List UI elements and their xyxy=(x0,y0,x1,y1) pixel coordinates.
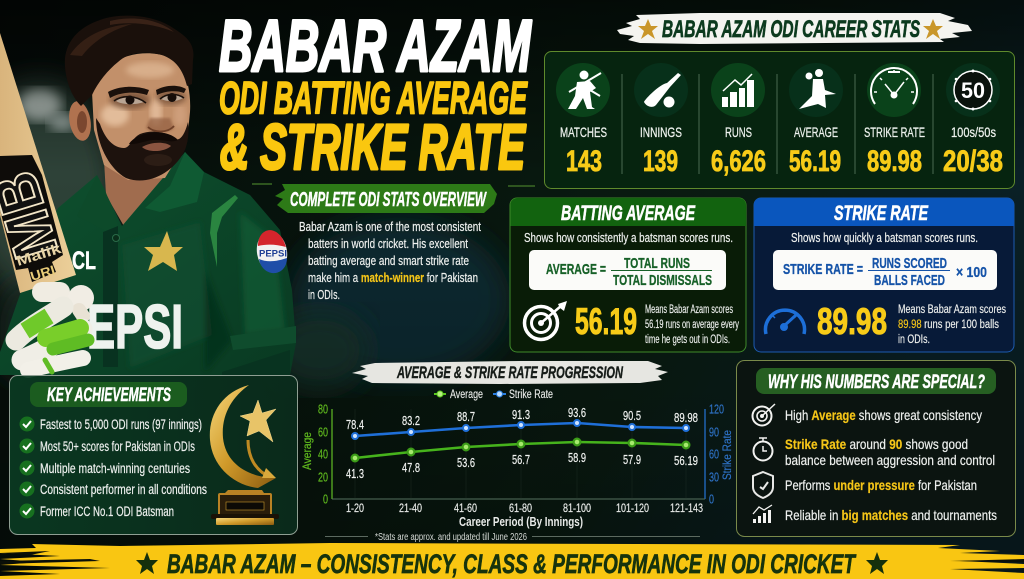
overview paragraph: batters in world cricket. His excellent xyxy=(308,236,468,251)
formula box: × 100 xyxy=(956,264,987,281)
stat: matches xyxy=(556,63,610,178)
value: 89.98 xyxy=(817,301,887,342)
icon: batsman running xyxy=(789,63,843,117)
description: Shows how consistently a batsman scores runs. xyxy=(524,230,733,245)
strike rate value labels: 89.98 xyxy=(674,410,698,425)
strike rate value labels: 93.6 xyxy=(568,405,586,420)
right axis labels xyxy=(709,402,734,506)
overview heading brush: COMPLETE ODI STATS OVERVIEW xyxy=(290,189,487,211)
average value labels: 53.6 xyxy=(457,455,475,470)
cricket bat: URI xyxy=(28,262,57,284)
achievements list: Consistent performer in all conditions xyxy=(40,482,207,497)
right axis labels: 120 xyxy=(709,402,724,416)
heading pill: KEY ACHIEVEMENTS xyxy=(47,385,171,406)
reason: high average: High Average shows great consistency xyxy=(785,407,982,423)
x axis labels: 21-40 xyxy=(399,501,422,515)
stat: runs xyxy=(711,63,766,178)
icon: gold crescent trophy xyxy=(210,385,279,525)
strike rate value labels: 88.7 xyxy=(457,409,475,424)
right axis labels: 30 xyxy=(709,470,719,484)
stat: average xyxy=(789,63,843,178)
right axis labels: 0 xyxy=(709,492,714,506)
icon: target xyxy=(524,301,567,340)
overview paragraph: Babar Azam is one of the most consistent xyxy=(299,219,481,234)
stat: matches: 143 xyxy=(566,145,602,178)
icon: 50 badge: 50 xyxy=(961,78,985,103)
average value labels: 56.7 xyxy=(512,452,530,467)
overview heading brush xyxy=(252,184,535,213)
formula box: RUNS SCORED xyxy=(872,255,947,272)
heading: STRIKE RATE xyxy=(834,202,929,225)
chart heading brush xyxy=(352,361,668,384)
legend: Average xyxy=(450,389,483,401)
stat: innings: 139 xyxy=(643,145,678,178)
eyes and brows xyxy=(108,87,149,98)
x axis labels xyxy=(346,501,703,515)
panel: why his numbers are special xyxy=(736,360,1016,536)
explanation xyxy=(645,304,739,346)
main title xyxy=(219,6,532,183)
overview paragraph: make him a match-winner for Pakistan xyxy=(308,270,478,285)
heading: BATTING AVERAGE xyxy=(561,202,696,225)
achievements list: Fastest to 5,000 ODI runs (97 innings) xyxy=(40,417,202,432)
icon: target xyxy=(752,404,775,426)
left axis labels xyxy=(300,402,328,506)
formula box xyxy=(773,250,997,290)
hair xyxy=(65,16,193,106)
stat: strike rate: 89.98 xyxy=(867,145,922,178)
x axis labels: 121-143 xyxy=(670,501,703,515)
achievements list: Former ICC No.1 ODI Batsman xyxy=(40,504,174,519)
stat: 100s/50s: 20/38 xyxy=(943,145,1003,178)
player neck xyxy=(104,160,172,228)
average value labels: 56.19 xyxy=(674,453,698,468)
chart heading brush: AVERAGE & STRIKE RATE PROGRESSION xyxy=(396,363,623,382)
heading pill xyxy=(30,382,187,407)
title line: BABAR AZAM: BABAR AZAM xyxy=(219,6,532,87)
x axis title: Career Period (By Innings) xyxy=(459,514,583,529)
career stats heading brush xyxy=(617,13,972,44)
icon: shield xyxy=(753,472,773,498)
explanation: 56.19 runs on average every xyxy=(645,319,739,331)
icon: batsman xyxy=(556,63,610,117)
icon: rising bars xyxy=(711,63,765,117)
stat: innings: INNINGS xyxy=(640,124,682,140)
legend: Strike Rate xyxy=(509,389,553,401)
right axis labels: 60 xyxy=(709,446,719,462)
cricket bat xyxy=(0,33,76,293)
value: 56.19 xyxy=(575,301,637,342)
x axis labels: 41-60 xyxy=(454,501,477,515)
right axis labels: Strike Rate xyxy=(720,430,734,480)
strike rate value labels: 83.2 xyxy=(402,413,420,428)
x axis labels: 101-120 xyxy=(616,501,649,515)
left axis labels: 60 xyxy=(318,424,328,440)
overview paragraph: batting average and smart strike rate xyxy=(308,253,469,268)
panel: batting average xyxy=(510,198,746,352)
left axis labels: 20 xyxy=(318,470,328,484)
panel: key achievements xyxy=(10,376,298,534)
explanation: 89.98 runs per 100 balls xyxy=(898,319,999,331)
stat: runs: RUNS xyxy=(725,124,752,140)
panel: career stats xyxy=(544,52,1014,188)
average value labels xyxy=(346,450,698,481)
reason: big matches: Reliable in big matches and tournaments xyxy=(785,507,997,523)
formula box xyxy=(529,250,726,290)
left axis labels: 0 xyxy=(323,492,328,506)
banner stars xyxy=(136,552,158,574)
right axis labels: 90 xyxy=(709,424,719,440)
formula box: AVERAGE = xyxy=(546,261,606,278)
beard xyxy=(96,118,189,180)
sleeve pepsi patch: PEPSI xyxy=(259,248,287,260)
title line: ODI BATTING AVERAGE: ODI BATTING AVERAGE xyxy=(219,72,528,124)
overview paragraph xyxy=(299,219,481,302)
average line xyxy=(352,439,689,461)
average value labels: 41.3 xyxy=(346,466,364,481)
formula box: BALLS FACED xyxy=(874,272,945,289)
formula box: TOTAL DISMISSALS xyxy=(613,272,712,289)
chart: average and strike rate progression xyxy=(300,361,734,529)
achievements list xyxy=(40,417,207,519)
strike rate value labels xyxy=(346,405,698,432)
footnote: *Stats are approx. and updated till June 2026 xyxy=(375,532,527,543)
x axis labels: 1-20 xyxy=(346,501,364,515)
reason: strike rate: Strike Rate around 90 shows good xyxy=(785,436,968,452)
player head xyxy=(65,16,193,180)
icon: stopwatch xyxy=(754,438,772,460)
bottom banner xyxy=(0,543,1024,579)
strike rate value labels: 91.3 xyxy=(512,407,530,422)
title line: STRIKE RATE: & STRIKE RATE xyxy=(220,111,526,183)
formula box: STRIKE RATE = xyxy=(783,261,863,278)
stat: runs: 6,626 xyxy=(711,145,766,178)
left axis labels: Average xyxy=(300,432,314,470)
explanation: time he gets out in ODIs. xyxy=(645,334,730,346)
icon: growth chart xyxy=(753,505,772,523)
average value labels: 57.9 xyxy=(623,452,641,467)
icon: stopwatch gauge xyxy=(867,63,921,117)
average value labels: 47.8 xyxy=(402,460,420,475)
sleeve pepsi patch xyxy=(254,229,290,275)
collar xyxy=(77,175,118,232)
reason: strike rate xyxy=(785,436,995,468)
jersey sponsor text xyxy=(72,247,183,362)
achievements list: Multiple match-winning centuries xyxy=(40,461,190,476)
formula box: TOTAL RUNS xyxy=(624,255,690,272)
stat: strike rate: STRIKE RATE xyxy=(864,124,925,140)
stat: average: AVERAGE xyxy=(794,124,838,140)
explanation: in ODIs. xyxy=(898,334,930,346)
jersey sponsor text: CL xyxy=(72,247,96,275)
reason: under pressure: Performs under pressure for Pakistan xyxy=(785,477,977,493)
player jersey xyxy=(0,152,296,375)
jersey sponsor text: EPSI xyxy=(87,293,183,362)
overview paragraph: in ODIs. xyxy=(308,287,340,302)
left axis labels: 40 xyxy=(318,446,328,462)
checkmarks xyxy=(20,416,34,518)
strike rate value labels: 78.4 xyxy=(346,417,364,432)
stat: matches: MATCHES xyxy=(560,124,607,140)
average value labels: 58.9 xyxy=(568,450,586,465)
stat: average: 56.19 xyxy=(789,145,841,178)
x axis labels: 81-100 xyxy=(563,501,591,515)
stat: 100s/50s: 100s/50s xyxy=(951,124,996,140)
sleeve stripe xyxy=(210,195,238,267)
achievements list: Most 50+ scores for Pakistan in ODIs xyxy=(40,439,195,454)
left axis labels: 80 xyxy=(318,402,328,416)
icon: bat and ball xyxy=(634,63,688,117)
cricket bat: Malik xyxy=(14,240,63,269)
legend xyxy=(434,389,553,401)
batting gloves xyxy=(16,285,94,372)
axes xyxy=(332,409,705,499)
strike rate line xyxy=(352,420,689,439)
stat: innings xyxy=(634,63,688,178)
stat: 100s/50s xyxy=(943,63,1003,178)
player photo illustration xyxy=(0,16,296,375)
x axis labels: 61-80 xyxy=(509,501,532,515)
explanation: Means Babar Azam scores xyxy=(645,304,733,316)
icon: speedometer xyxy=(766,309,804,334)
stat: strike rate xyxy=(864,63,925,178)
strike rate value labels: 90.5 xyxy=(623,408,641,423)
panel: strike rate xyxy=(754,198,1014,352)
explanation xyxy=(898,304,1006,346)
jersey star badge xyxy=(144,231,183,271)
